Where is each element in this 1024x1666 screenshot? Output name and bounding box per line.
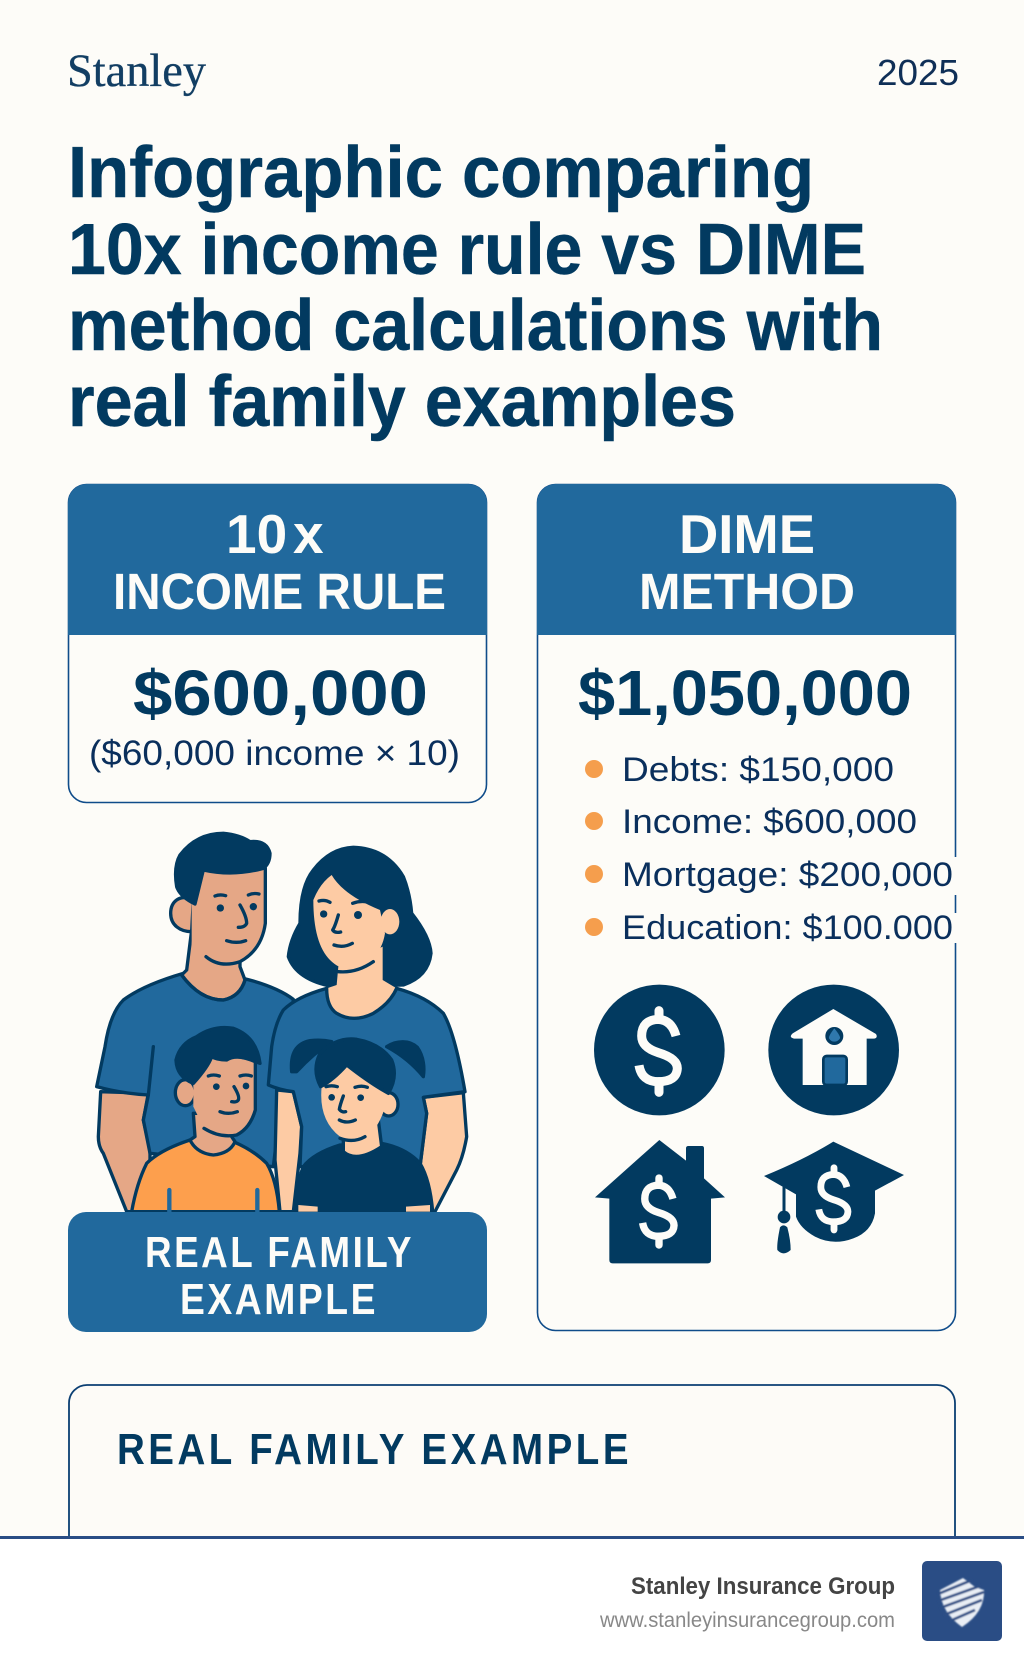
title: real family examples [68,362,736,442]
icon group: DIME icons [594,985,904,1263]
footer company name: Stanley Insurance Group [631,1573,895,1600]
list item: income: Income: $600,000 [622,803,917,841]
panel header: 10x income rule: x [293,503,324,565]
amount: $600,000: $600,000 [133,657,428,729]
list: DIME breakdown [585,751,958,947]
figure: son [132,1028,279,1212]
banner: real family example: REAL FAMILY [145,1228,414,1277]
footer website: www.stanleyinsurancegroup.com [599,1609,895,1632]
banner: real family example [68,1212,487,1332]
year: 2025 [877,52,959,93]
icon: shield logo [922,1561,1002,1641]
list item: education: Education: $100.000 [622,909,953,947]
title: 10x income rule vs DIME [68,210,866,290]
icon: house in circle [768,985,899,1115]
panel header: DIME method: DIME [679,503,815,565]
brand name: Stanley [67,45,206,97]
list item: debts: Debts: $150,000 [622,751,894,789]
icon: graduation cap with dollar [764,1142,904,1253]
title [68,133,883,442]
panel heading: REAL FAMILY EXAMPLE [117,1425,632,1474]
title: Infographic comparing [68,133,814,213]
panel header: DIME method: METHOD [639,563,855,620]
panel: 10x income rule [68,484,487,802]
figure: father [97,833,293,1212]
illustration: family [97,833,467,1212]
figure: daughter [291,1039,433,1212]
panel: DIME method [537,484,958,1330]
amount: $1,050,000: $1,050,000 [578,657,912,729]
icon: dollar coin [594,985,725,1115]
list item: mortgage: Mortgage: $200,000 [622,856,953,894]
banner: real family example: EXAMPLE [180,1275,378,1324]
icon: house with dollar [595,1140,725,1263]
panel header: 10x income rule: 10 [226,503,287,565]
panel header: DIME method [537,484,956,635]
panel: real family example (cropped) [69,1385,955,1540]
title: method calculations with [68,286,883,366]
footer [0,1536,1024,1666]
panel header: 10x income rule [68,484,487,635]
calculation note: ($60,000 income × 10) [89,734,460,773]
panel header: 10x income rule: INCOME RULE [113,563,446,620]
figure: mother [268,847,467,1212]
